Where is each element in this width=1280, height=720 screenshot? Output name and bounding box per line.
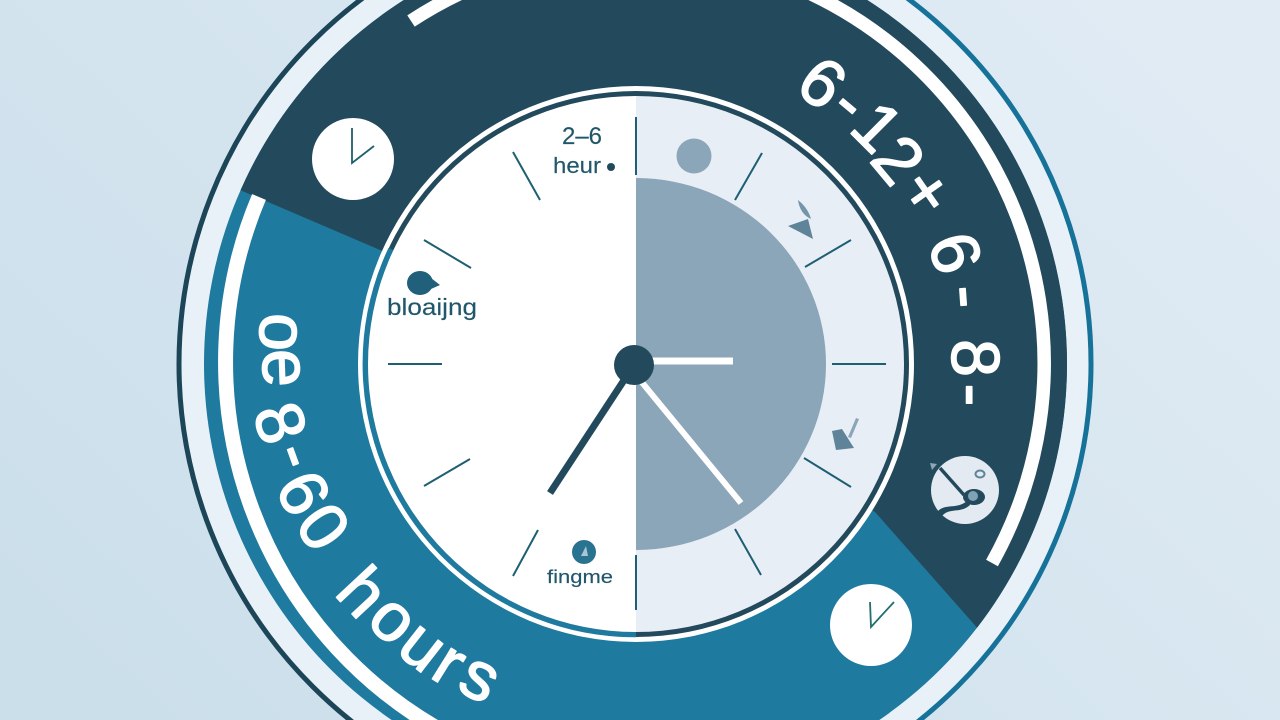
label: fingme: fingme (547, 567, 613, 587)
panel: white left half of dial (368, 96, 636, 632)
heading: oe 8-60 hours arc label: 6 (261, 458, 345, 528)
heading: 6-12+ 6-8- arc label: 6 (784, 41, 860, 125)
panel: grey half disc (636, 178, 826, 550)
clock face outer white ring (358, 86, 914, 642)
heading: 6-12+ 6-8- arc label: 6 (913, 223, 997, 283)
heading: oe 8-60 hours arc label: r (420, 625, 480, 701)
heading: 6-12+ 6-8- arc label: - (936, 384, 1012, 406)
heading: 6-12+ 6-8- arc label: 8 (937, 339, 1013, 377)
heading: oe 8-60 hours arc label (238, 312, 513, 718)
heading: 6-12+ 6-8- arc label (784, 41, 1013, 406)
heading: oe 8-60 hours arc label: s (448, 635, 513, 718)
icon: clock lower right (830, 584, 912, 666)
heading: oe 8-60 hours arc label: 0 (281, 490, 365, 564)
heading: 6-12+ 6-8- arc label: - (818, 66, 884, 139)
label: 2-6 hours: 2–6 (562, 123, 602, 150)
icon: top shape (832, 418, 859, 450)
panel: blue segment of outer band (204, 0, 1067, 720)
heading: 6-12+ 6-8- arc label: - (929, 283, 1007, 311)
heading: oe 8-60 hours arc label: u (385, 604, 462, 687)
heading: 6-12+ 6-8- arc label: + (884, 154, 970, 230)
icon: clock upper left (312, 118, 394, 200)
icon: grey dot (676, 138, 712, 174)
clock face dark ring (363, 91, 909, 637)
heading: oe 8-60 hours arc label: e (247, 348, 325, 388)
white arc on dark segment (411, 0, 1044, 563)
heading: oe 8-60 hours arc label: h (322, 552, 404, 632)
heading: oe 8-60 hours arc label: o (244, 312, 322, 352)
dial ticks (388, 117, 886, 610)
outer rim ring (179, 0, 1091, 720)
panel: dark segment of outer band (240, 0, 1067, 628)
heading: oe 8-60 hours arc label: - (258, 431, 337, 479)
heading: 6-12+ 6-8- arc label: 1 (837, 87, 917, 167)
white clock hand horizontal (636, 358, 733, 364)
clock hub (614, 345, 654, 385)
icon: round face with hand (930, 456, 999, 524)
icon: leaf (788, 200, 813, 239)
heading: 6-12+ 6-8- arc label: 2 (857, 121, 939, 199)
panel: pale right half of dial (636, 96, 904, 632)
label: bloating: bloaijng (387, 294, 477, 320)
dark clock hand (550, 368, 632, 493)
clock face blue ring section (365, 249, 636, 635)
icon: bloating drop (407, 271, 440, 295)
heading: oe 8-60 hours arc label: o (354, 578, 434, 659)
label: 2-6 hours (553, 123, 615, 178)
white clock hand diagonal (640, 380, 741, 503)
icon: fingme dot (572, 540, 596, 564)
white arc on blue segment (226, 197, 459, 720)
label: 2-6 hours: heur (553, 153, 601, 178)
heading: oe 8-60 hours arc label: 8 (238, 393, 322, 453)
